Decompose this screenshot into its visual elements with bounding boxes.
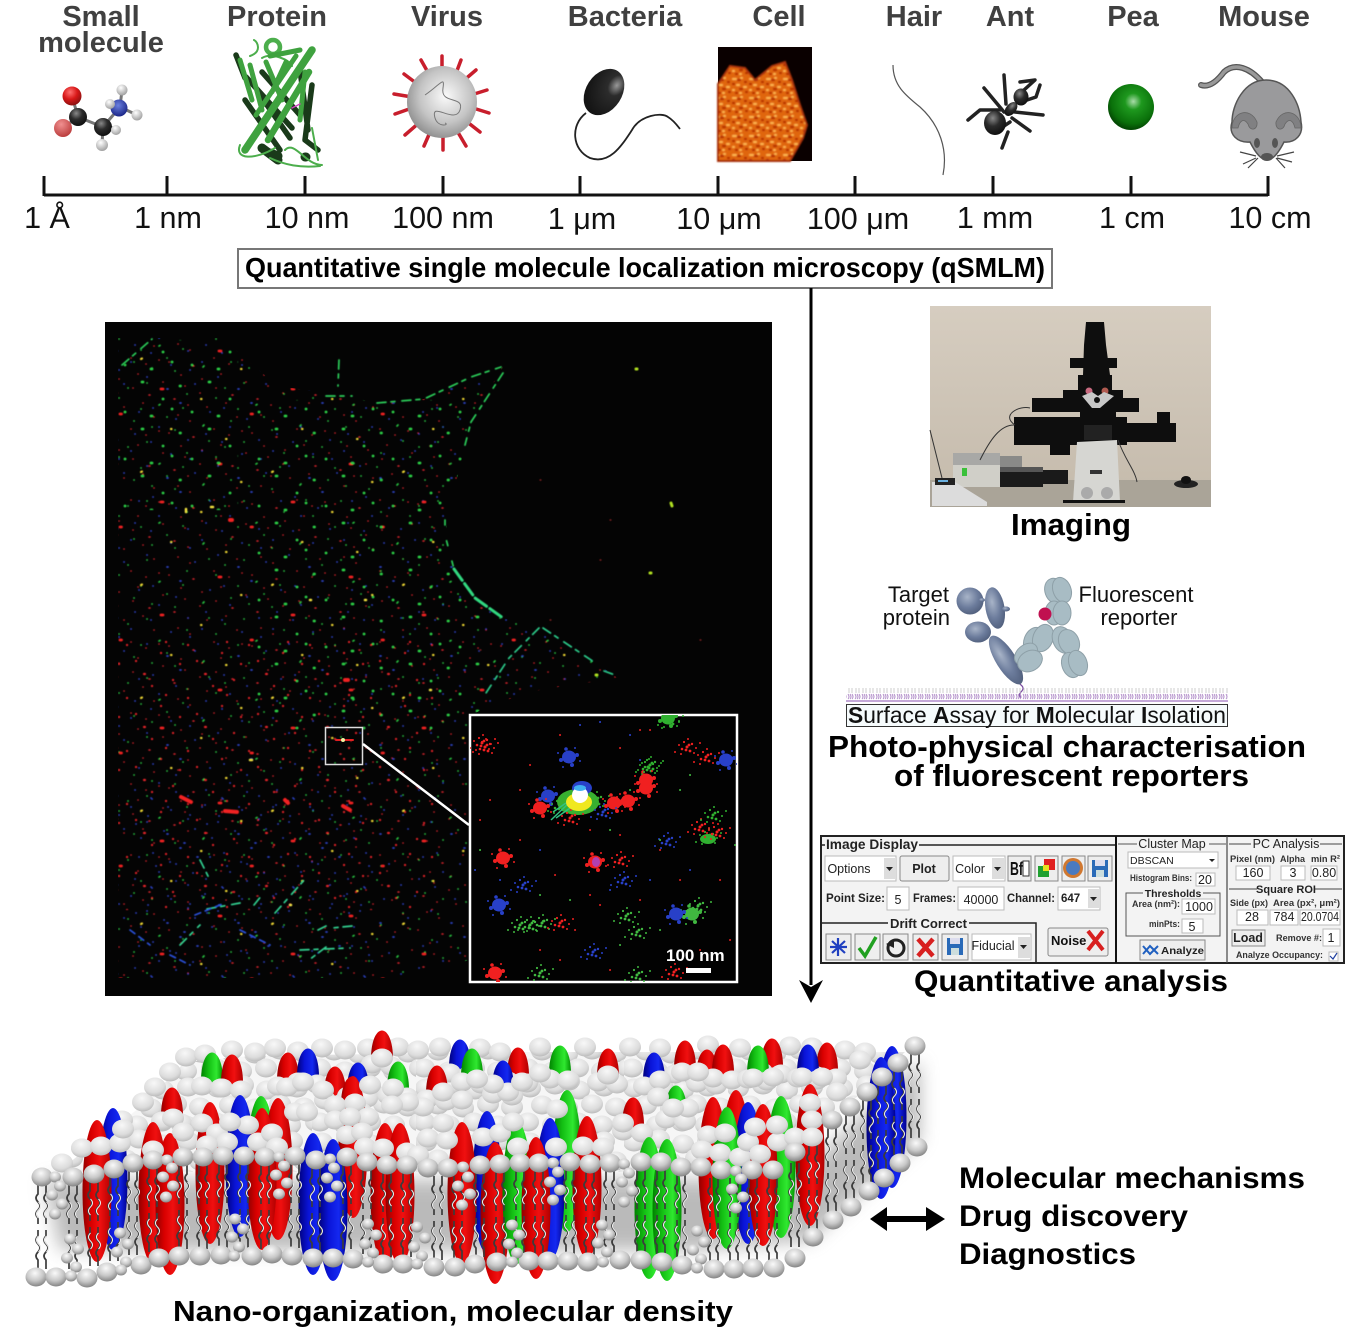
label: Target protein: protein <box>883 605 950 630</box>
image display section: Channel: <box>1007 893 1055 905</box>
panel: analysis software <box>821 836 1344 963</box>
heading: Pea: Pea <box>1107 1 1160 33</box>
soft shadow behind front face <box>45 1060 920 1250</box>
cluster map section: Area (nm²): <box>1132 899 1180 910</box>
image display section: Options <box>827 862 871 876</box>
PC analysis section <box>1229 837 1342 961</box>
fluorescent reporter antibody <box>1010 575 1091 680</box>
PC analysis section: Area (px², μm²) <box>1273 898 1340 909</box>
scale bar: 100 nm <box>666 946 725 965</box>
size scale axis: 10 nm <box>265 201 349 235</box>
lipid heads over receptors <box>71 1048 871 1166</box>
PC analysis section: 3 <box>1290 866 1297 880</box>
label: photo-physical characterisation: of fluorescent reporters <box>894 758 1249 793</box>
label: photo-physical characterisation: Photo-physical characterisation <box>828 729 1306 764</box>
drift correct section: Noise <box>1051 933 1086 948</box>
PC analysis section: 1 <box>1328 931 1335 945</box>
image display section: 40000 <box>964 893 998 907</box>
title box: qSMLM: Quantitative single molecule localization microscopy (qSMLM) <box>245 252 1045 283</box>
label: Fluorescent reporter: Fluorescent <box>1079 582 1193 607</box>
PC analysis section: Side (px) <box>1230 898 1268 909</box>
label: Fluorescent reporter: reporter <box>1100 605 1178 630</box>
PC analysis section: Alpha <box>1280 854 1306 865</box>
image display section: Frames: <box>913 893 956 905</box>
size scale axis: 1 μm <box>548 202 616 236</box>
text: applications: Drug discovery <box>959 1200 1188 1233</box>
reporter dye <box>1038 608 1052 620</box>
inset panel <box>469 708 738 984</box>
label: nano-organization: Nano-organization, molecular density <box>173 1296 733 1328</box>
text: applications: Molecular mechanisms <box>959 1162 1305 1195</box>
cluster map section: 20 <box>1198 873 1212 887</box>
cluster map section <box>1118 837 1226 960</box>
image display section: Plot <box>912 862 937 876</box>
arrow: flow down <box>799 288 823 1003</box>
size scale axis: 1 Å <box>24 200 71 235</box>
PC analysis section: 20.0704 <box>1301 910 1339 924</box>
photo: microscope <box>930 306 1211 507</box>
drift correct section: Drift Correct <box>890 916 968 931</box>
heading: Ant: Ant <box>986 1 1034 33</box>
PC analysis section: min R² <box>1311 854 1340 865</box>
front upper lipid heads <box>32 1036 926 1186</box>
heading: Hair: Hair <box>886 1 942 33</box>
image display section <box>822 837 1115 910</box>
PC analysis section: Analyze Occupancy: <box>1236 950 1323 961</box>
image display section: Image Display <box>826 837 918 852</box>
PC analysis section: Pixel (nm) <box>1230 854 1275 865</box>
heading: Small molecule: Small <box>62 1 140 33</box>
top membrane surface <box>58 1052 905 1172</box>
heading: Small molecule: molecule <box>38 27 164 59</box>
label: Target protein: Target <box>888 582 949 607</box>
PC analysis section: 0.80 <box>1312 866 1336 880</box>
zoom marker square <box>326 728 362 764</box>
PC analysis section: 28 <box>1245 910 1259 924</box>
PC analysis section: 160 <box>1243 866 1263 880</box>
size scale axis: 100 μm <box>807 202 909 236</box>
arrow: double-headed <box>870 1207 945 1231</box>
icon: protein barrel <box>236 40 322 167</box>
icon: bacteria <box>575 61 680 159</box>
size scale axis: 1 cm <box>1099 201 1165 235</box>
PC analysis section: Remove #: <box>1276 933 1322 944</box>
image display section: Bf <box>1010 859 1024 879</box>
panel: super-resolution image <box>105 322 772 996</box>
size scale axis: 1 mm <box>957 201 1033 235</box>
PC analysis section: Load <box>1233 931 1263 945</box>
back row receptors <box>191 1030 847 1106</box>
PC analysis section: 784 <box>1274 910 1294 924</box>
image display section: 647 <box>1061 893 1080 905</box>
text: applications: Diagnostics <box>959 1238 1136 1271</box>
front lower lipid heads <box>26 1138 928 1288</box>
interior small lipid heads <box>46 1152 749 1282</box>
image display section: 5 <box>895 893 902 907</box>
image display section: Point Size: <box>826 893 885 905</box>
heading: Bacteria: Bacteria <box>568 1 683 33</box>
PC analysis section: PC Analysis <box>1253 837 1319 851</box>
heading: Virus: Virus <box>411 1 483 33</box>
cluster map section: DBSCAN <box>1130 855 1174 867</box>
heading: Protein: Protein <box>227 1 327 33</box>
size scale axis: 100 nm <box>392 201 494 235</box>
icon: ant <box>968 75 1043 148</box>
icon: cell image <box>718 47 812 161</box>
surface edge lipids <box>51 1036 876 1172</box>
icon: hair <box>893 65 944 175</box>
cluster map section: Analyze <box>1161 945 1204 957</box>
target protein shape <box>956 586 1029 698</box>
label: Imaging: Imaging <box>1011 507 1131 542</box>
heading: Cell: Cell <box>752 1 806 33</box>
localization dots in cell <box>118 338 616 978</box>
lipid tails <box>36 1054 922 1269</box>
icon: virus <box>394 56 489 150</box>
drift correct section: Fiducial <box>971 939 1015 953</box>
label: Quantitative analysis: Quantitative analysis <box>914 965 1228 998</box>
size scale axis <box>24 176 1312 236</box>
icon: pea <box>1108 84 1154 130</box>
illustration: membrane with receptors <box>26 1030 928 1288</box>
icon: small molecule <box>54 84 142 151</box>
image display section: Color <box>955 862 985 876</box>
mid row receptors <box>151 1062 696 1142</box>
cluster map section: Thresholds <box>1145 888 1201 900</box>
drift correct section <box>822 916 1108 963</box>
PC analysis section: Square ROI <box>1256 884 1316 896</box>
heading: Mouse: Mouse <box>1218 1 1310 33</box>
cluster map section: minPts: <box>1149 919 1180 930</box>
cluster map section: Cluster Map <box>1138 837 1206 851</box>
cluster map section: 1000 <box>1185 900 1213 914</box>
cluster map section: Histogram Bins: <box>1130 873 1192 884</box>
red and yellow accents <box>181 369 701 905</box>
cluster map section: 5 <box>1189 920 1196 934</box>
passivated surface <box>846 688 1228 704</box>
size scale axis: 10 μm <box>676 202 762 236</box>
size scale axis: 1 nm <box>134 201 202 235</box>
surface label box: Surface Assay for Molecular Isolation <box>848 702 1226 728</box>
diagram: SAMI assay <box>846 575 1228 728</box>
size scale axis: 10 cm <box>1228 201 1312 235</box>
icon: mouse <box>1201 67 1302 168</box>
front receptors <box>82 1046 906 1284</box>
green filaments along the cell edge <box>122 339 615 965</box>
